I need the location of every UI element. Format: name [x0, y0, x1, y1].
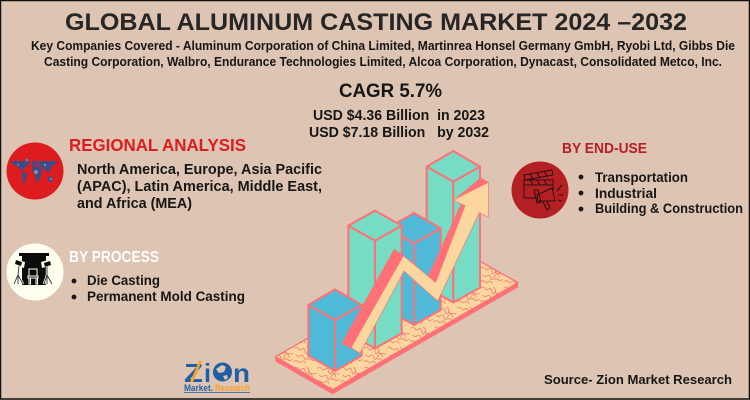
regional list text: [77, 162, 322, 212]
key companies text: Key Companies Covered - Aluminum Corporation of China Limited, Martinrea Honsel Germany GmbH, Ryobi Ltd, Gibbs Die: [31, 39, 735, 53]
process list: Die Casting: [87, 272, 160, 288]
heading: by process: BY PROCESS: [69, 249, 159, 266]
bar: blue middle: [387, 213, 441, 325]
regional list text: and Africa (MEA): [77, 196, 192, 212]
logo: Zion Market Research: i: [204, 358, 211, 388]
CAGR heading: CAGR 5.7%: [339, 81, 442, 102]
icon: photo studio: [6, 244, 64, 300]
logo: Zion Market Research: Research: [215, 383, 250, 393]
market size values: USD $4.36 Billion in 2023: [313, 108, 485, 124]
logo: Zion Market Research: [184, 358, 250, 393]
bar: blue front: [308, 289, 362, 371]
chart: isometric bars with arrow: [275, 151, 518, 394]
bar: teal second: [348, 211, 402, 348]
market size values: USD $7.18 Billion by 2032: [309, 125, 489, 141]
market size values: [309, 108, 489, 141]
process list: Permanent Mold Casting: [87, 288, 245, 304]
regional list text: (APAC), Latin America, Middle East,: [77, 179, 322, 195]
logo: Zion Market Research: Market.: [184, 383, 213, 393]
icon: world map: [6, 142, 64, 200]
platform: [275, 251, 518, 394]
arrow: growth trend: [341, 178, 489, 353]
source note: Source- Zion Market Research: [544, 372, 732, 387]
end-use list: Transportation: [595, 170, 688, 185]
end-use list: Industrial: [595, 186, 657, 201]
bar: tall teal back: [427, 151, 480, 302]
process list: [72, 272, 245, 304]
icon: clapperboard and megaphone: [512, 162, 568, 218]
end-use list: Building & Construction: [595, 201, 743, 216]
logo: Zion Market Research: n: [233, 358, 250, 388]
title: GLOBAL ALUMINUM CASTING MARKET 2024 –2032: [65, 9, 687, 36]
regional list text: North America, Europe, Asia Pacific: [77, 162, 322, 178]
heading: by end-use: BY END-USE: [562, 140, 647, 157]
key companies text: [31, 39, 735, 69]
logo: Zion Market Research: Z: [184, 358, 203, 388]
heading: regional analysis: REGIONAL ANALYSIS: [69, 135, 246, 155]
end-use list: [579, 170, 743, 216]
key companies text: Casting Corporation, Walbro, Endurance Technologies Limited, Alcoa Corporation, Dynacast, Consolidated Metco, Inc.: [44, 55, 722, 69]
